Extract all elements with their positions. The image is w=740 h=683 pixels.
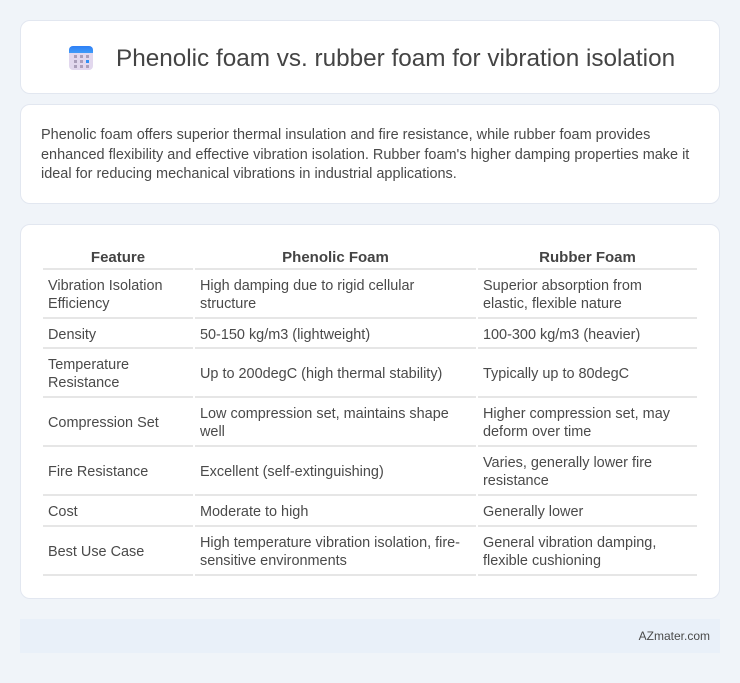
row: cost: Moderate to high	[200, 504, 308, 520]
icon: calendar	[69, 46, 93, 70]
row: density: 100-300 kg/m3 (heavier)	[483, 327, 640, 343]
summary text	[41, 127, 690, 182]
row: fire resistance: resistance	[483, 473, 549, 489]
row: compression set: Low compression set, maintains shape	[200, 406, 449, 422]
row: best use case	[48, 535, 656, 569]
row: best use case: sensitive environments	[200, 553, 347, 569]
summary text: Phenolic foam offers superior thermal insulation and fire resistance, while rubber foam provides	[41, 127, 650, 143]
panel: title card	[20, 20, 720, 94]
row: compression set: Compression Set	[48, 415, 159, 431]
row: fire resistance: Excellent (self-extinguishing)	[200, 464, 384, 480]
row: temperature resistance: Resistance	[48, 375, 119, 391]
comparison table	[43, 249, 697, 576]
row: best use case: Best Use Case	[48, 544, 144, 560]
row: best use case: flexible cushioning	[483, 553, 601, 569]
panel: comparison table	[20, 224, 720, 599]
row: best use case: High temperature vibration isolation, fire-	[200, 535, 460, 551]
row: temperature resistance: Up to 200degC (high thermal stability)	[200, 366, 442, 382]
footer text: AZmater.com: AZmater.com	[639, 629, 710, 643]
row: compression set	[48, 406, 670, 440]
panel: summary	[20, 104, 720, 204]
table header: Phenolic Foam	[282, 249, 389, 266]
row: vibration isolation efficiency: High damping due to rigid cellular	[200, 278, 414, 294]
row: cost: Generally lower	[483, 504, 583, 520]
row: density	[48, 327, 640, 343]
table header: Rubber Foam	[539, 249, 636, 266]
row: temperature resistance	[48, 357, 629, 391]
title: Phenolic foam vs. rubber foam for vibration isolation	[116, 45, 675, 72]
row: vibration isolation efficiency: Efficiency	[48, 296, 110, 312]
row: density: 50-150 kg/m3 (lightweight)	[200, 327, 370, 343]
row: best use case: General vibration damping,	[483, 535, 656, 551]
row: vibration isolation efficiency: Superior absorption from	[483, 278, 642, 294]
row: compression set: Higher compression set, may	[483, 406, 670, 422]
row: cost	[48, 504, 584, 520]
table header: Feature	[91, 249, 145, 266]
row: vibration isolation efficiency: structure	[200, 296, 256, 312]
row: compression set: well	[200, 424, 225, 440]
summary text: ideal for reducing mechanical vibrations in industrial applications.	[41, 166, 457, 182]
row: vibration isolation efficiency: elastic, flexible nature	[483, 296, 622, 312]
row: vibration isolation efficiency: Vibration Isolation	[48, 278, 163, 294]
row: fire resistance: Varies, generally lower fire	[483, 455, 652, 471]
summary text: enhanced flexibility and effective vibration isolation. Rubber foam's higher damping properties make it	[41, 146, 689, 162]
footer bar	[20, 619, 720, 653]
row: temperature resistance: Typically up to 80degC	[483, 366, 629, 382]
row: cost: Cost	[48, 504, 78, 520]
row: compression set: deform over time	[483, 424, 591, 440]
row: temperature resistance: Temperature	[48, 357, 129, 373]
row: fire resistance: Fire Resistance	[48, 464, 148, 480]
row: density: Density	[48, 327, 96, 343]
row: vibration isolation efficiency	[48, 278, 642, 312]
table header	[91, 249, 636, 266]
row: fire resistance	[48, 455, 652, 489]
